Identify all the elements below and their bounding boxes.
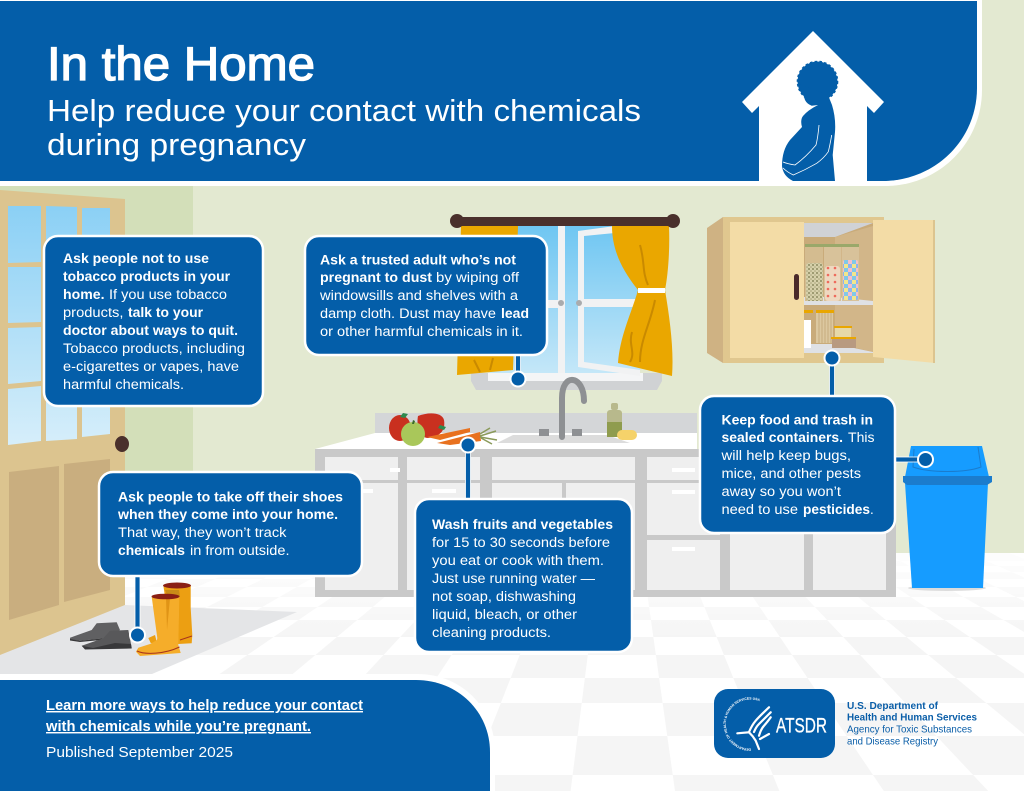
connector: trash can bbox=[893, 452, 933, 467]
floor base bbox=[0, 553, 1024, 791]
agency name: U.S. Department of bbox=[847, 700, 938, 712]
callout: dust: pregnant to dust bbox=[320, 270, 433, 285]
icon: soap and sponge bbox=[607, 403, 637, 440]
callout: sealed containers: sealed containers. bbox=[722, 430, 843, 445]
callout: dust: by wiping off bbox=[436, 270, 519, 285]
subtitle: during pregnancy bbox=[47, 127, 307, 162]
callout: tobacco products: Tobacco products, including bbox=[63, 341, 245, 356]
agency name: and Disease Registry bbox=[847, 736, 939, 748]
callout: shoes: chemicals bbox=[118, 543, 185, 558]
callout: wash fruits bbox=[415, 499, 632, 652]
callout: wash fruits: not soap, dishwashing bbox=[432, 589, 576, 604]
callout: sealed containers: This bbox=[848, 430, 875, 445]
icon: door knob bbox=[115, 436, 129, 452]
icon: seal ring text: DEPARTMENT OF HEALTH & HUMAN SERVICES USA bbox=[724, 697, 760, 751]
callout: tobacco products: e-cigarettes or vapes, have bbox=[63, 359, 239, 374]
window bbox=[471, 226, 662, 390]
logo: ATSDR bbox=[714, 689, 835, 758]
floor highlight near the wall bbox=[0, 553, 1024, 640]
callout: dust: lead bbox=[501, 306, 529, 321]
callout: sealed containers: mice, and other pests bbox=[722, 466, 861, 481]
icon: rain boots bbox=[136, 582, 192, 656]
callout: shoes bbox=[99, 472, 362, 576]
subtitle: Help reduce your contact with chemicals bbox=[47, 93, 641, 128]
callout: wash fruits: Just use running water — bbox=[432, 571, 596, 586]
callout: shoes: in from outside. bbox=[190, 543, 290, 558]
floor shadow by door bbox=[0, 605, 297, 674]
callout: tobacco products: products, bbox=[63, 305, 124, 320]
callout: sealed containers: . bbox=[870, 502, 874, 517]
callout: shoes: when they come into your home. bbox=[117, 507, 338, 522]
callout: wash fruits: liquid, bleach, or other bbox=[432, 607, 578, 622]
sink and faucet bbox=[497, 380, 630, 443]
callout: shoes: Ask people to take off their shoes bbox=[118, 490, 343, 504]
link text bbox=[45, 698, 363, 735]
subtitle bbox=[47, 93, 641, 162]
callout: sealed containers: away so you won’t bbox=[722, 484, 841, 499]
callout: dust bbox=[305, 236, 547, 355]
wall bbox=[0, 0, 1024, 553]
callout: dust: or other harmful chemicals in it. bbox=[320, 324, 523, 339]
callout: dust: windowsills and shelves with a bbox=[319, 288, 519, 303]
logo wordmark: ATSDR bbox=[776, 714, 827, 738]
upper cabinet bbox=[707, 217, 935, 363]
icon: dress shoes bbox=[70, 622, 132, 650]
icon: fruits and vegetables bbox=[389, 413, 497, 446]
connector: shoes bbox=[130, 575, 145, 642]
agency name: Health and Human Services bbox=[847, 712, 977, 724]
icon: trash can bbox=[903, 446, 992, 591]
callout: wash fruits: for 15 to 30 seconds before bbox=[432, 535, 610, 550]
agency name: Agency for Toxic Substances bbox=[847, 724, 972, 736]
callout: sealed containers bbox=[700, 396, 895, 533]
agency name bbox=[847, 700, 977, 748]
door bbox=[0, 190, 129, 655]
callout: wash fruits: cleaning products. bbox=[432, 625, 551, 640]
publication date: Published September 2025 bbox=[46, 745, 233, 761]
callout: wash fruits: you eat or cook with them. bbox=[432, 553, 604, 568]
callout: tobacco products: doctor about ways to quit. bbox=[63, 323, 238, 338]
callout: sealed containers: pesticides bbox=[803, 502, 870, 517]
callout: tobacco products: harmful chemicals. bbox=[63, 377, 184, 392]
callout: dust: Ask a trusted adult who’s not bbox=[320, 252, 517, 268]
connector: window bbox=[510, 354, 526, 386]
left wall section bbox=[0, 186, 193, 553]
callout: wash fruits: Wash fruits and vegetables bbox=[432, 517, 613, 532]
callout: dust: damp cloth. Dust may have bbox=[320, 306, 496, 321]
callout: sealed containers: will help keep bugs, bbox=[720, 448, 851, 463]
callout: sealed containers: need to use bbox=[722, 502, 798, 517]
icon: house with pregnant person bbox=[742, 31, 884, 181]
checkered floor tiles bbox=[0, 400, 1024, 791]
connector: cabinet bbox=[824, 350, 840, 398]
callout: tobacco products: Ask people not to use bbox=[63, 251, 209, 266]
callout: tobacco products: talk to your bbox=[128, 305, 204, 320]
footer panel bbox=[0, 674, 495, 791]
curtains and rod bbox=[450, 214, 680, 376]
callout: tobacco products: home. bbox=[63, 287, 104, 302]
connector: fruits bbox=[460, 438, 476, 501]
counter and lower cabinets bbox=[315, 413, 896, 597]
callout: shoes: That way, they won’t track bbox=[118, 525, 287, 540]
callout: tobacco products: If you use tobacco bbox=[109, 287, 227, 302]
callout: tobacco products: tobacco products in your bbox=[63, 269, 231, 284]
callout: tobacco products bbox=[44, 236, 263, 406]
callout: sealed containers: Keep food and trash in bbox=[722, 412, 873, 428]
icon: eagle bbox=[737, 707, 771, 749]
link text: with chemicals while you’re pregnant. bbox=[45, 719, 311, 735]
header panel bbox=[0, 0, 982, 186]
title: In the Home bbox=[47, 37, 315, 90]
link text: Learn more ways to help reduce your contact bbox=[46, 698, 363, 714]
